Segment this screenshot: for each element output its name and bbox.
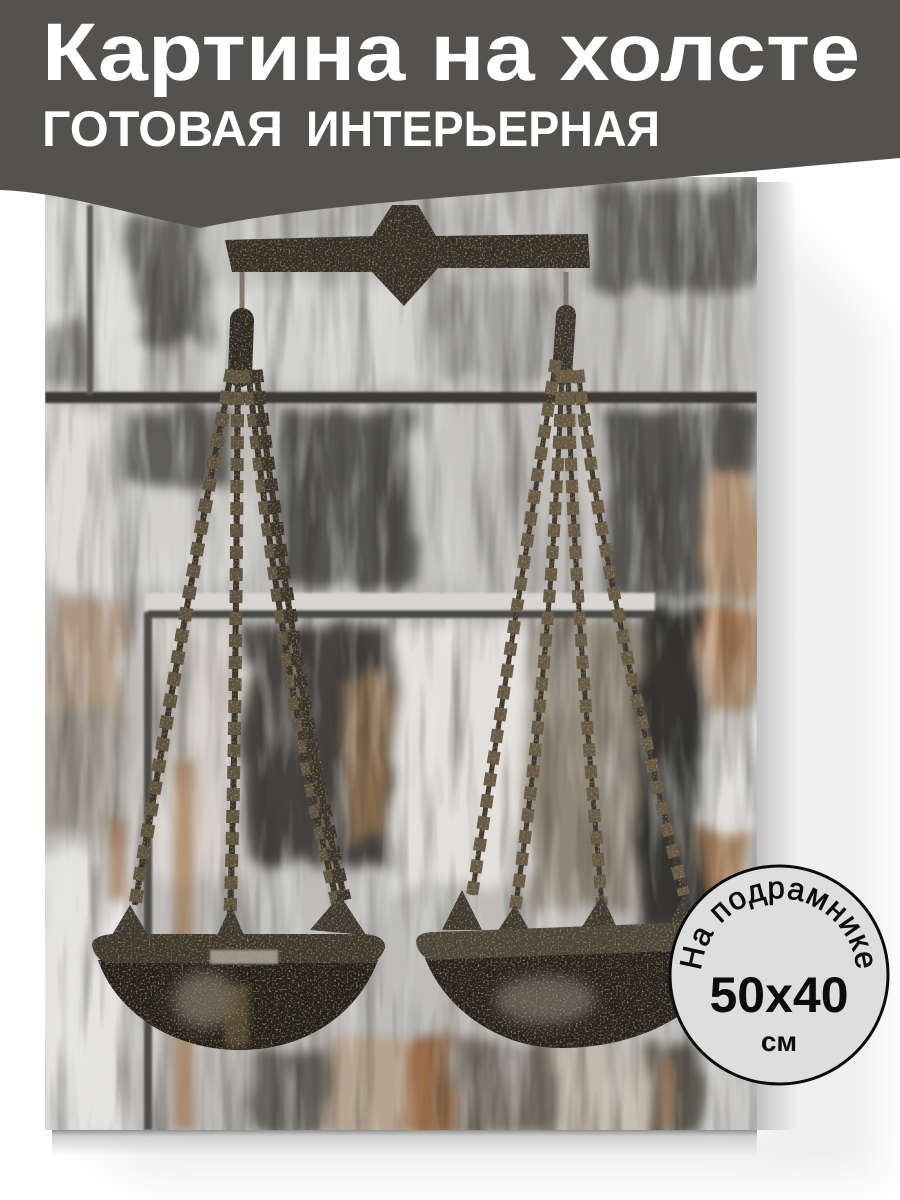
left bowl: [92, 895, 385, 1050]
painting: rusty scales on a weathered wall: [30, 177, 760, 1140]
subtitle: [42, 101, 660, 157]
scale beam: [225, 205, 590, 312]
wall background: [30, 177, 760, 1140]
badge curved label: На подрамнике: [680, 881, 872, 969]
subtitle: ИНТЕРЬЕРНАЯ: [306, 101, 660, 157]
planks: [45, 205, 757, 1130]
badge size: 50x40: [709, 967, 849, 1023]
right chains: [472, 315, 684, 910]
header banner: [0, 0, 900, 228]
rust drips: [108, 760, 674, 1130]
title: Картина на холсте: [42, 7, 860, 98]
left chains: [135, 320, 345, 915]
subtitle: ГОТОВАЯ: [42, 101, 283, 157]
badge unit: см: [761, 1026, 797, 1057]
right bowl: [416, 890, 700, 1048]
canvas shadow: [52, 182, 880, 1180]
size badge: [668, 864, 890, 1086]
vertical weather streaks: [45, 177, 757, 1130]
